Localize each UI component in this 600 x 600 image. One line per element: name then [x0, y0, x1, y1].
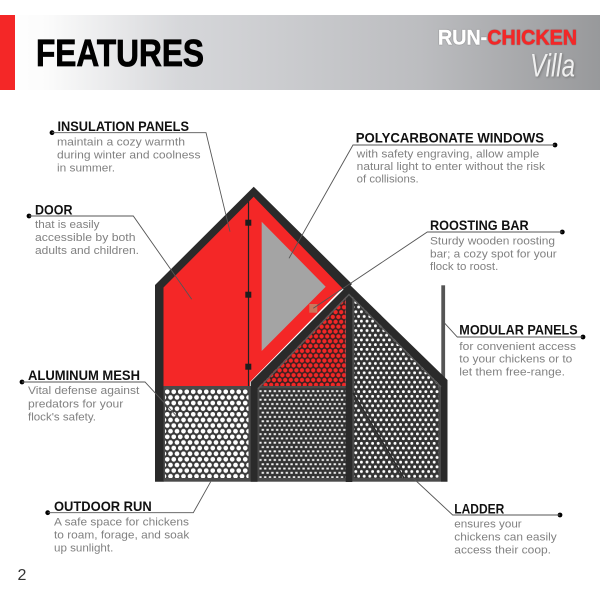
roosting bar marker: [309, 304, 317, 313]
callout: polycarbonate windows: with safety engraving, allow ample: [356, 148, 539, 160]
side post: [441, 285, 445, 378]
header band: [0, 15, 600, 90]
callout: door: DOOR: [35, 201, 72, 217]
ladder: [353, 393, 404, 478]
title: FEATURES: [36, 33, 204, 75]
callout: aluminum mesh: ALUMINUM MESH: [28, 367, 140, 383]
callout: modular panels: let them free-range.: [459, 367, 565, 379]
callout: modular panels: [443, 321, 585, 379]
red-backed upper mesh: [258, 296, 346, 386]
door hinges: [245, 220, 251, 370]
brand subtitle: Villa: [530, 48, 575, 84]
callout: ladder: access their coop.: [454, 545, 551, 557]
callout: insulation panels: [50, 118, 230, 232]
callout: roosting bar: ROOSTING BAR: [430, 217, 529, 233]
polycarbonate window: [262, 222, 326, 351]
callout: modular panels: MODULAR PANELS: [459, 321, 578, 337]
callout: insulation panels: maintain a cozy warmth: [57, 137, 185, 149]
callout: polycarbonate windows: natural light to enter without the risk: [357, 161, 545, 173]
red accent bar: [0, 15, 15, 90]
door hinge line: [248, 199, 249, 386]
callout: outdoor run: [45, 482, 211, 554]
red insulated wall: [163, 196, 344, 386]
callout: polycarbonate windows: [289, 129, 557, 258]
main frame: [155, 187, 448, 482]
callout: insulation panels: during winter and coolness: [57, 150, 201, 162]
callout: ladder: LADDER: [454, 500, 504, 516]
callout: door: [27, 201, 192, 299]
callout: ladder: [413, 478, 562, 557]
right mesh panel: [352, 296, 441, 481]
callout: roosting bar: [313, 217, 565, 308]
left aluminum mesh panel: [163, 386, 251, 481]
callout: aluminum mesh: flock's safety.: [28, 411, 96, 423]
callout: outdoor run: to roam, forage, and soak: [54, 529, 190, 541]
callout: aluminum mesh: Vital defense against: [28, 385, 140, 397]
callout: aluminum mesh: predators for your: [28, 398, 124, 410]
callout: polycarbonate windows: POLYCARBONATE WINDOWS: [356, 129, 544, 145]
callout: roosting bar: Sturdy wooden roosting: [430, 235, 555, 247]
callout: ladder: ensures your: [454, 518, 522, 530]
callout: insulation panels: in summer.: [57, 162, 115, 174]
callout: ladder: chickens can easily: [454, 532, 557, 544]
roof inner edge: [258, 294, 441, 389]
callout: insulation panels: INSULATION PANELS: [58, 118, 189, 134]
callout: door: accessible by both: [35, 232, 136, 244]
callout: outdoor run: up sunlight.: [54, 542, 113, 554]
callout: modular panels: to your chickens or to: [459, 354, 572, 366]
callout: roosting bar: bar; a cozy spot for your: [430, 248, 557, 260]
callout: outdoor run: A safe space for chickens: [54, 516, 189, 528]
coop illustration: [155, 187, 448, 482]
callout: door: that is easily: [35, 219, 100, 231]
callout: aluminum mesh: [20, 367, 182, 423]
callout: outdoor run: OUTDOOR RUN: [54, 498, 152, 514]
callout: modular panels: for convenient access: [459, 341, 576, 353]
callout: roosting bar: flock to roost.: [430, 261, 498, 273]
callout: door: adults and children.: [35, 245, 139, 257]
brand name: RUN-CHICKEN: [438, 26, 577, 50]
inner frame bars: [163, 298, 441, 482]
center mesh panel: [257, 386, 346, 481]
callout: polycarbonate windows: of collisions.: [357, 174, 419, 186]
page number: 2: [18, 567, 26, 584]
